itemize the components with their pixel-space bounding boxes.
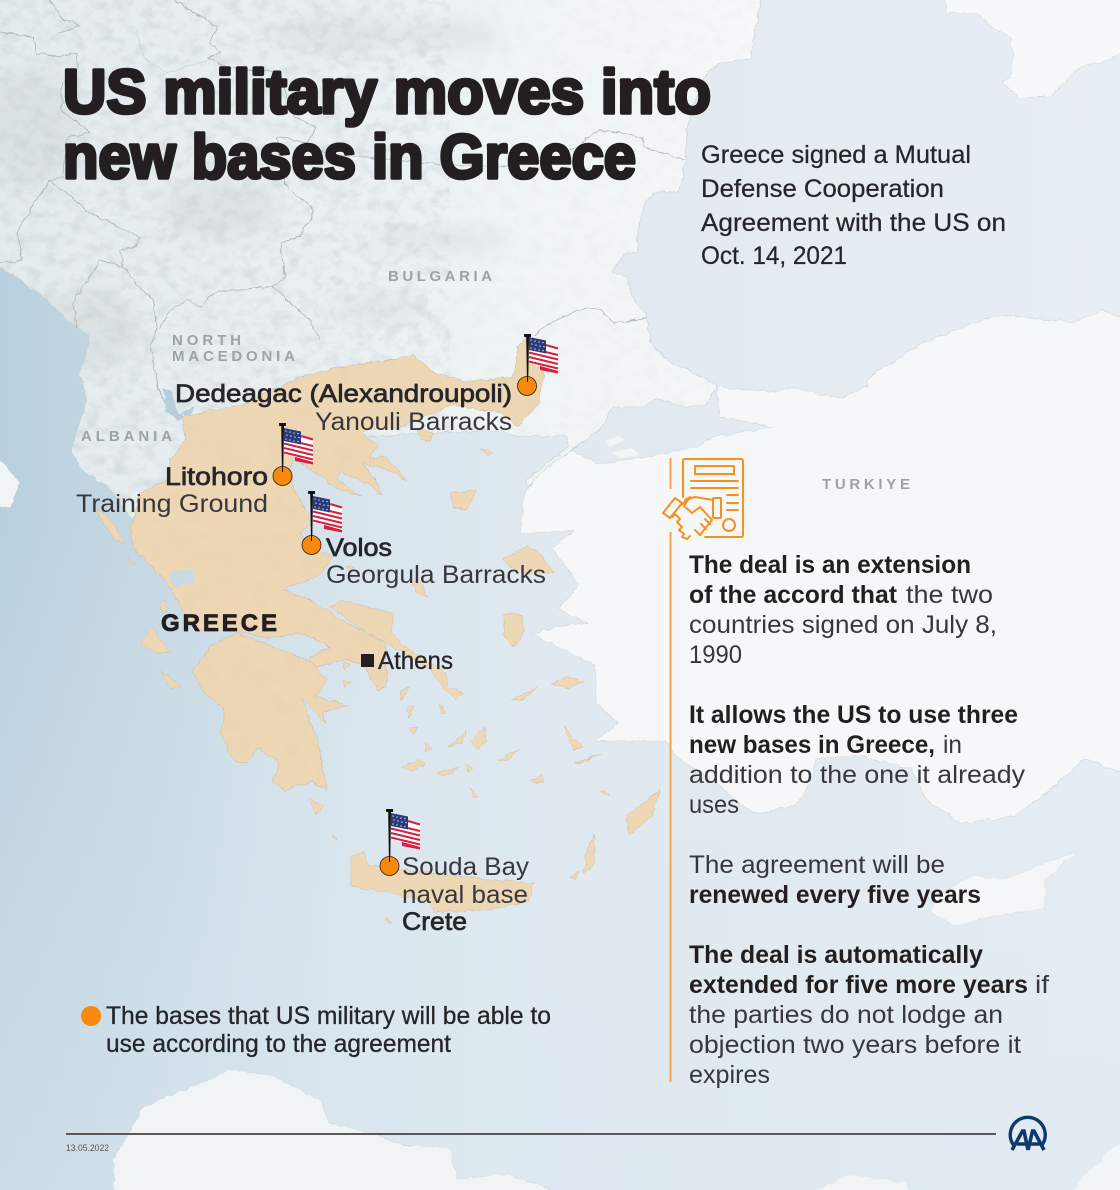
paragraph 2 [689, 701, 1026, 819]
land: Turkiye [520, 310, 1120, 823]
paragraph 4: if [1035, 971, 1049, 999]
borders [0, 0, 683, 410]
base: Litohoro [76, 423, 313, 518]
base: Litohoro: Litohoro [165, 463, 268, 491]
title: new bases in Greece [63, 123, 636, 192]
land: Italy heel [0, 448, 20, 507]
paragraph 4 [689, 941, 1049, 1089]
paragraph 3: The agreement will be [689, 851, 945, 879]
paragraph 1: the two [906, 581, 993, 609]
base: Dedeagac: Dedeagac (Alexandroupoli) [175, 380, 512, 408]
intro text: Defense Cooperation [701, 175, 944, 203]
lakes [163, 388, 195, 420]
base: Souda Bay: Crete [402, 908, 467, 936]
label: Greece: GREECE [161, 610, 277, 637]
paragraph 4: The deal is automatically [689, 941, 983, 969]
flag [529, 337, 558, 374]
land: North Africa [114, 1070, 579, 1190]
country labels: MACEDONIA [172, 348, 297, 365]
country labels: BULGARIA [388, 268, 494, 285]
marker [518, 376, 536, 396]
land: Cyprus [931, 851, 1077, 926]
intro text: Greece signed a Mutual [701, 141, 971, 169]
base: Litohoro: Training Ground [76, 490, 268, 518]
paragraph 2: uses [689, 791, 739, 819]
marker [380, 856, 399, 876]
paragraph 1: The deal is an extension [689, 551, 971, 579]
map: Greek islands [95, 430, 660, 923]
paragraph 2: It allows the US to use three [689, 701, 1018, 729]
paragraph 4: extended for five more years [689, 971, 1028, 999]
title: US military moves into [63, 58, 711, 127]
article text [689, 551, 1049, 1089]
base: Souda Bay: Souda Bay [402, 853, 530, 881]
paragraph 4: objection two years before it [689, 1031, 1021, 1059]
land: Levant coast [1064, 1132, 1120, 1190]
legend: use according to the agreement [106, 1030, 451, 1058]
intro text: Agreement with the US on [701, 209, 1006, 237]
intro text: Oct. 14, 2021 [701, 242, 847, 270]
paragraph 4: the parties do not lodge an [689, 1001, 1003, 1029]
flag [313, 496, 342, 532]
paragraph 2: in [943, 731, 962, 759]
base: Dedeagac: Yanouli Barracks [315, 408, 512, 436]
paragraph 1 [689, 551, 997, 669]
intro text [701, 141, 1006, 270]
land: Balkans [0, 0, 762, 525]
terrain texture on Balkans [0, 0, 451, 514]
marker [273, 466, 292, 486]
logo: AA [1010, 1117, 1045, 1150]
date: 13.05.2022 [66, 1143, 109, 1153]
land: Egyptian coast [800, 1175, 907, 1190]
map: Greece mainland and Peloponnese [120, 330, 550, 810]
flag [391, 813, 420, 850]
footer rule [66, 1133, 996, 1135]
paragraph 3: renewed every five years [689, 881, 981, 909]
country labels [81, 268, 912, 493]
paragraph 1: 1990 [689, 641, 742, 669]
rivers [137, 30, 207, 73]
country labels: TURKIYE [822, 476, 912, 493]
terrain shading on Balkan mountains [0, 17, 510, 370]
land: Crimea [942, 0, 1120, 98]
label: Athens with capital marker: Athens [378, 647, 453, 675]
inland sea: Marmara islands [605, 436, 640, 458]
icon: agreement document with handshake [663, 459, 743, 539]
base: Souda Bay: naval base [402, 881, 528, 909]
legend [81, 1002, 551, 1058]
title [63, 58, 711, 192]
paragraph 1: of the accord that [689, 581, 898, 609]
country labels: ALBANIA [81, 428, 174, 445]
base: Volos: Georgula Barracks [326, 561, 546, 589]
orange divider line [670, 458, 672, 1082]
paragraph 1: countries signed on July 8, [689, 611, 997, 639]
base: Volos [302, 491, 546, 589]
Amvrakian gulf [167, 570, 195, 587]
base: Souda Bay [380, 809, 530, 936]
paragraph 3 [689, 851, 981, 909]
base: Volos: Volos [326, 534, 392, 562]
country labels: NORTH [172, 332, 243, 349]
paragraph 2: new bases in Greece, [689, 731, 935, 759]
paragraph 2: addition to the one it already [689, 761, 1026, 789]
flag [284, 428, 313, 464]
legend: The bases that US military will be able to [106, 1002, 551, 1030]
marker [302, 536, 321, 554]
base: Dedeagac [175, 334, 558, 436]
paragraph 4: expires [689, 1061, 770, 1089]
